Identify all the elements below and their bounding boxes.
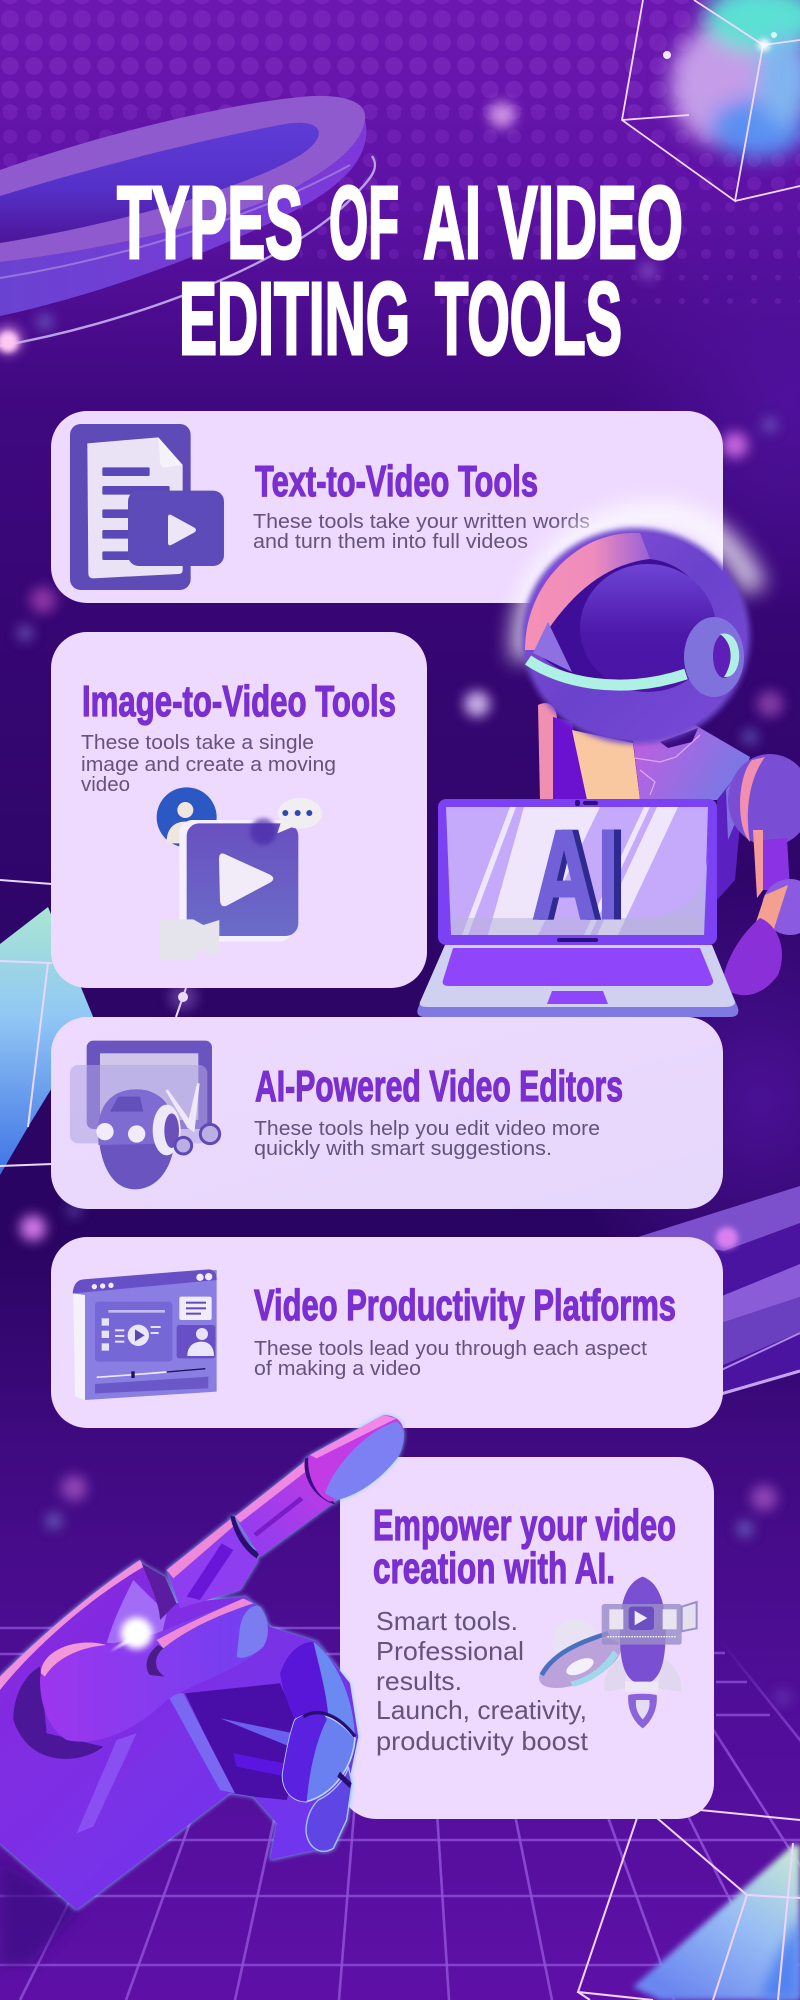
laptop base (417, 945, 738, 1017)
decorative crystal and wire cube: bottom right (578, 1810, 800, 2000)
glowing bokeh dots (0, 102, 791, 1705)
panel: image-to-video tools (51, 632, 427, 988)
panel: AI-powered video editors (51, 1017, 723, 1209)
description: These tools take a single (81, 732, 314, 754)
robot body (538, 703, 800, 995)
description (253, 511, 590, 553)
AI lettering on screen: I (605, 804, 625, 945)
description: Smart tools. (376, 1606, 518, 1636)
AI lettering on screen: A (538, 804, 602, 945)
robot hand pointing (0, 1415, 404, 1910)
heading (373, 1501, 676, 1593)
description: Professional (376, 1636, 524, 1666)
description: These tools take your written words (253, 511, 590, 533)
description: image and create a moving (81, 754, 336, 776)
description: productivity boost (376, 1726, 589, 1756)
fingertip (308, 1415, 404, 1502)
heading: Empower your video (373, 1501, 676, 1550)
description: Launch, creativity, (376, 1695, 587, 1725)
helmet (522, 528, 750, 744)
dark inner palm (185, 1683, 295, 1800)
title: TOOLS (435, 261, 622, 376)
robot astronaut (522, 515, 800, 995)
palm and wrist (0, 1560, 358, 1910)
AI lettering on screen: A (532, 804, 596, 945)
panel: text-to-video tools (51, 411, 723, 603)
decorative wire cube with glowing blob: top right (622, 0, 800, 201)
perspective grid floor (0, 1628, 800, 2000)
description: of making a video (254, 1358, 421, 1380)
heading: Text-to-Video Tools (255, 457, 538, 506)
heading: creation with AI. (373, 1544, 615, 1593)
description: These tools help you edit video more (254, 1118, 600, 1140)
mint visor band (528, 660, 686, 685)
description (254, 1338, 647, 1380)
icon: robot head with scissors (70, 1041, 220, 1189)
index finger base (167, 1517, 258, 1608)
visor (533, 559, 716, 692)
heading: AI-Powered Video Editors (255, 1062, 623, 1111)
icon: video play with avatar and chat (157, 787, 322, 960)
description: and turn them into full videos (253, 531, 528, 553)
laptop (417, 799, 738, 1017)
AI lettering on screen: I (598, 804, 618, 945)
panel: empower your video creation (340, 1457, 714, 1819)
index finger middle (235, 1463, 335, 1557)
description (254, 1118, 600, 1160)
icon: rocket with disc and film (532, 1577, 697, 1728)
description (376, 1606, 589, 1756)
description: video (81, 774, 130, 796)
heading: Image-to-Video Tools (82, 677, 396, 726)
decorative ring: right middle (638, 1186, 800, 1400)
thumb segments (280, 1642, 355, 1739)
icon: video app window (73, 1269, 217, 1400)
earpiece (684, 617, 744, 697)
description: These tools lead you through each aspect (254, 1338, 647, 1360)
decorative crystal: left middle (0, 880, 197, 1175)
decorative ring: top left (0, 96, 375, 352)
title: AI (423, 165, 481, 280)
description (81, 732, 336, 796)
title (117, 165, 683, 376)
hand shadow trail (0, 1860, 80, 1965)
icon: document with play button (70, 424, 224, 590)
helmet glow (524, 515, 755, 660)
laptop screen (438, 799, 717, 945)
description: results. (376, 1666, 462, 1696)
title: OF (329, 165, 399, 280)
description: quickly with smart suggestions. (254, 1138, 552, 1160)
title: TYPES (117, 165, 303, 280)
lens flare (121, 1617, 153, 1649)
panel: video productivity platforms (51, 1237, 723, 1428)
title: EDITING (179, 261, 410, 376)
knuckle finger (40, 1598, 267, 1742)
